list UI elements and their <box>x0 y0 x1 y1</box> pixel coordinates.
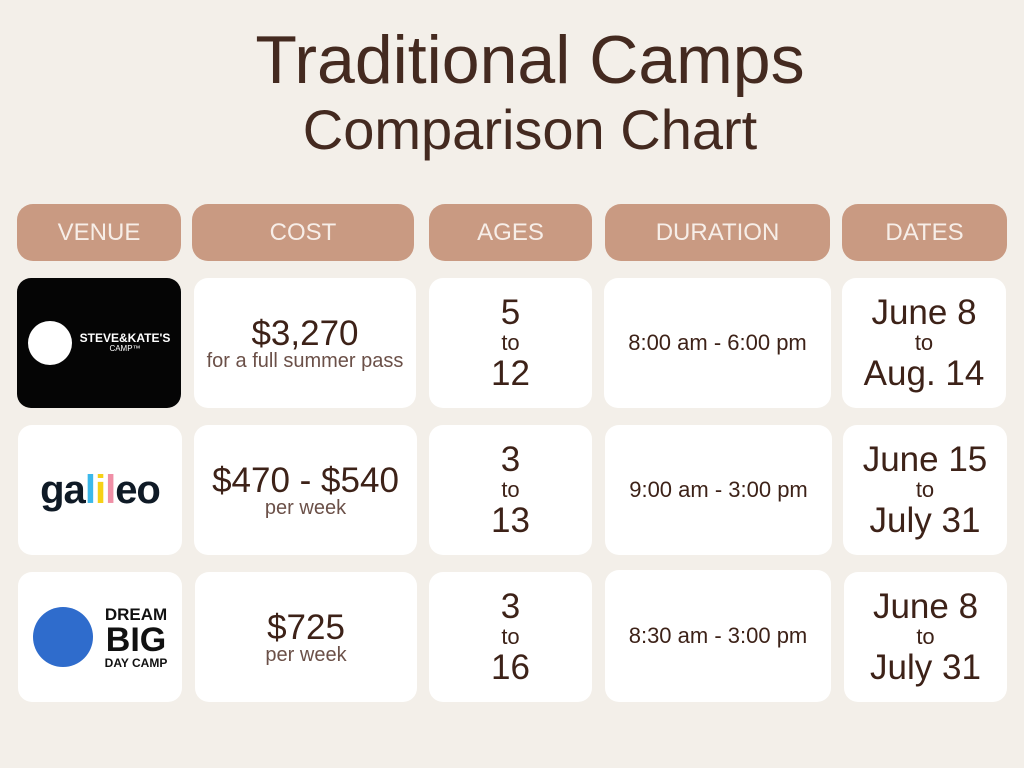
row 3 ages: to <box>501 624 520 649</box>
row 3 ages: 16 <box>491 648 530 687</box>
logo: steve & kate's: CAMP™ <box>109 344 141 353</box>
row 1 ages: 12 <box>491 354 530 393</box>
header: duration <box>605 204 830 261</box>
row 2 cost <box>194 425 417 555</box>
row 3 duration <box>605 570 831 702</box>
row 3 ages <box>429 572 592 702</box>
row 2 dates <box>843 425 1007 555</box>
row 2 ages: 13 <box>491 501 530 540</box>
row 2 cost: $470 - $540 <box>212 460 399 500</box>
header: cost <box>192 204 414 261</box>
row 2 ages: to <box>501 477 520 502</box>
logo: dream big day camp <box>18 572 182 702</box>
header: ages: AGES <box>477 218 544 246</box>
row 3 duration: 8:30 am - 3:00 pm <box>629 623 807 648</box>
row 1 cost: $3,270 <box>251 314 359 352</box>
row 3 cost: per week <box>265 644 347 666</box>
row 2 ages: 3 <box>501 440 520 479</box>
row 3 ages: 3 <box>501 587 520 626</box>
logo: galileo <box>18 425 182 555</box>
row 1 dates: Aug. 14 <box>864 354 984 393</box>
row 1 ages: 5 <box>501 293 520 332</box>
row 3 cost <box>195 572 417 702</box>
logo: galileo: galileo <box>40 468 160 512</box>
title <box>255 22 805 161</box>
row 1 duration: 8:00 am - 6:00 pm <box>628 330 807 355</box>
row 1 cost <box>194 278 416 408</box>
header: dates: DATES <box>885 218 964 246</box>
row 1 cost: for a full summer pass <box>207 350 403 372</box>
header: duration: DURATION <box>656 218 779 246</box>
row 2 duration: 9:00 am - 3:00 pm <box>629 477 808 502</box>
header: ages <box>429 204 592 261</box>
row 3 dates: July 31 <box>870 648 981 687</box>
row 2 dates: June 15 <box>863 440 987 479</box>
row 3 dates <box>844 572 1007 702</box>
logo: dream big day camp: DREAM <box>105 604 167 624</box>
row 1 dates: June 8 <box>871 293 977 332</box>
header: venue: VENUE <box>58 218 140 246</box>
row 1 dates <box>842 278 1006 408</box>
row 3 dates: to <box>916 624 935 649</box>
title: Comparison Chart <box>303 98 757 161</box>
logo: dream big day camp: DAY CAMP <box>105 656 167 670</box>
row 2 cost: per week <box>265 496 346 518</box>
row 2 ages <box>429 425 592 555</box>
header: venue <box>17 204 181 261</box>
logo: steve & kate's: STEVE&KATE'S <box>80 331 170 345</box>
row 3 dates: June 8 <box>873 587 978 626</box>
row 2 dates: to <box>916 477 934 502</box>
row 1 ages <box>429 278 592 408</box>
row 1 ages: to <box>501 330 520 355</box>
row 3 cost: $725 <box>267 608 345 646</box>
title: Traditional Camps <box>255 22 805 98</box>
row 2 duration <box>605 425 832 555</box>
logo: dream big day camp: BIG <box>106 620 166 658</box>
row 2 dates: July 31 <box>870 501 980 540</box>
header: dates <box>842 204 1007 261</box>
logo: steve & kate's <box>17 278 181 408</box>
row 1 duration <box>604 278 831 408</box>
row 1 dates: to <box>915 330 933 355</box>
header: cost: COST <box>270 218 336 246</box>
